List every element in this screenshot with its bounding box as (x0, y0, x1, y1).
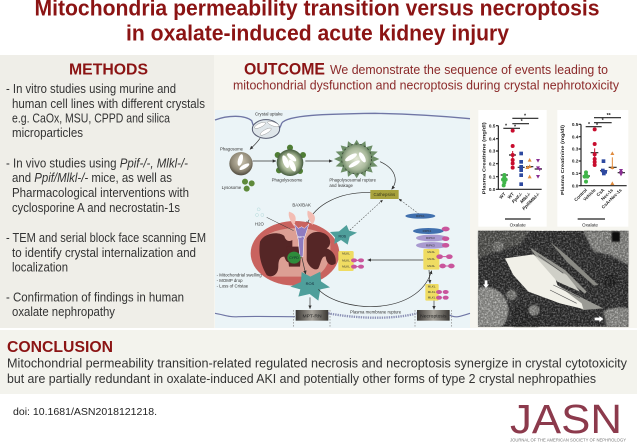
arrow (253, 160, 276, 162)
chart: right creatinine: 0.3 (572, 147, 579, 152)
chart: left creatinine: 0.1 (489, 174, 496, 179)
chart: right creatinine: Oxalate (582, 222, 598, 227)
chart: left creatinine: * (521, 119, 524, 125)
necroptosis signalling stack: RIPK3 (426, 243, 435, 247)
methods list: - TEM and serial block face scanning EM (6, 231, 206, 245)
chart: right creatinine: Plasma Creatinine (mg/dl) (560, 125, 566, 195)
chart: left creatinine: * (505, 124, 508, 130)
MLKL mitochondrial: MLKL (342, 251, 350, 255)
outcome text: mitochondrial dysfunction and necroptosis during crystal nephrotoxicity (233, 78, 620, 92)
chart: right creatinine: 0.1 (572, 171, 579, 176)
charts and micrograph (478, 110, 628, 327)
chart: left creatinine: * (524, 113, 527, 119)
outcome text: We demonstrate the sequence of events leading to (330, 63, 608, 77)
chart: right creatinine: ** (607, 113, 612, 119)
chart: left creatinine: 0.3 (489, 149, 496, 154)
chart: right creatinine (557, 110, 628, 227)
necroptosis box: Necroptosis (420, 313, 447, 319)
methods list (6, 82, 206, 319)
mitochondrial effects text (217, 273, 262, 288)
methods heading: METHODS (69, 62, 148, 78)
crystal uptake: Crystal uptake (255, 111, 283, 116)
MLKL mitochondrial: MLKL (342, 258, 350, 262)
conclusion text (7, 356, 628, 386)
methods list: oxalate nephropathy (12, 305, 116, 319)
chart: left creatinine: 0.2 (489, 161, 496, 166)
necroptosis signalling stack: MLKL (427, 264, 436, 268)
panel: outcome (214, 55, 637, 328)
chart: right creatinine: 0.2 (572, 159, 579, 164)
conclusion heading: CONCLUSION (7, 339, 113, 356)
ROS small star (330, 225, 357, 245)
mitochondrial effects text: - Mitochondrial swelling (217, 273, 262, 278)
chart: left creatinine: Plasma Creatinine (mg/dl) (482, 122, 488, 194)
chart: left creatinine: 0.0 (489, 187, 496, 192)
ruptured phagolysosome: Phagolysosomal rupture (329, 177, 377, 182)
ROS curve to MLKL (318, 271, 432, 307)
necroptosis signalling stack: MLKL (428, 296, 436, 300)
JASN logo: JOURNAL OF THE AMERICAN SOCIETY OF NEPHROLOGY (510, 438, 626, 442)
micrograph: crystal in TEM (478, 231, 628, 327)
mitochondrial effects text: - Loss of Cristae (217, 283, 249, 288)
necroptosis signalling stack: RIPK1 (423, 229, 432, 233)
dashed arrows (350, 199, 419, 230)
chart: right creatinine: CsA+Nec-1s (601, 187, 623, 210)
methods list: - In vivo studies using Ppif-/-, Mlkl-/- (6, 156, 188, 170)
MPT-RN box (296, 310, 328, 321)
H2O: H2O (255, 221, 265, 226)
plasma membrane bottom (215, 310, 470, 327)
methods list: and Ppif/Mlkl-/- mice, as well as (12, 171, 172, 185)
chart: left creatinine: * (514, 124, 517, 130)
methods list: localization (12, 260, 68, 274)
ruptured phagolysosome: and leakage (329, 183, 354, 188)
chart: right creatinine: * (588, 122, 591, 128)
cathepsins: Cathepsins (374, 192, 395, 197)
doi: doi: 10.1681/ASN2018121218. (13, 406, 157, 418)
arrow (305, 160, 332, 162)
mechanism diagram (215, 110, 470, 328)
phagosome (220, 147, 253, 175)
chart: right creatinine: * (596, 123, 599, 129)
plasma membrane rupture label: Plasma membrane rupture (350, 310, 402, 315)
methods list: cyclosporine A and necrostatin-1s (12, 201, 180, 215)
chart: right creatinine: 0.4 (572, 134, 579, 139)
outcome heading: OUTCOME (244, 60, 325, 78)
lysosome (222, 179, 255, 192)
chart: right creatinine: Nec-1s (600, 187, 614, 201)
necroptosis signalling stack: MLKL (427, 250, 436, 254)
CYPD: CYPD (289, 256, 299, 260)
mitochondrial effects text: - MOMP drop (217, 278, 243, 283)
cell membrane top (215, 113, 470, 136)
arrow cathepsins to pore (307, 193, 370, 225)
chart: right creatinine: Control (573, 188, 588, 202)
arrow MLKL translocation (368, 259, 423, 261)
chart: right creatinine: * (602, 118, 605, 124)
arrow to cathepsins (380, 162, 395, 189)
BAX/BAK: BAX/BAK (292, 202, 311, 207)
micrograph arrows (483, 280, 603, 322)
ROS large star (290, 272, 330, 301)
panel: conclusion (0, 330, 637, 394)
title (34, 0, 600, 46)
methods list: - In vitro studies using murine and (6, 82, 176, 96)
ruptured phagolysosome (329, 140, 379, 188)
outcome text (233, 63, 620, 92)
necroptosis box (417, 310, 450, 321)
conclusion text: Mitochondrial permeability transition-related regulated necrosis and necroptosis synergize in crystal cytotoxicity (7, 356, 628, 370)
mitochondrion (251, 202, 339, 286)
conclusion text: but are partially redundant in oxalate-induced AKI and potentially other forms of type 2 crystal nephropathies (7, 372, 596, 386)
cathepsins (370, 190, 399, 199)
panel: methods (0, 55, 214, 328)
chart: left creatinine: Mlkl-/- (519, 191, 532, 204)
chart: left creatinine: Ppif/Mlkl-/- (521, 191, 541, 211)
title: in oxalate-induced acute kidney injury (126, 20, 510, 46)
chart: right creatinine: 0.5 (572, 122, 579, 127)
JASN logo: JASN (510, 396, 622, 442)
arrows to outcomes (310, 297, 434, 309)
chart: left creatinine: WT (498, 191, 507, 200)
MLKL mitochondrial (338, 251, 364, 271)
lysosome: Lysosome (222, 185, 242, 190)
crystal uptake (250, 111, 283, 149)
methods list: microparticles (12, 126, 83, 140)
chart: left creatinine (478, 110, 547, 227)
chart: left creatinine: Oxalate (510, 222, 526, 227)
MPT-RN box: MPT-RN (302, 313, 322, 319)
ROS small star: ROS (339, 234, 347, 238)
phagolysosome (272, 145, 306, 183)
MPT pore: MPT (298, 235, 304, 239)
chart: right creatinine: CsA (595, 187, 606, 197)
ROS large star: ROS (306, 281, 315, 286)
phagolysosome: Phagolysosome (272, 178, 303, 183)
necroptosis signalling stack: MLKL (428, 290, 436, 294)
MLKL mitochondrial: MLKL (342, 265, 350, 269)
methods list: e.g. CaOx, MSU, CPPD and silica (12, 112, 170, 126)
necroptosis signalling stack (405, 213, 455, 301)
methods list: to identify crystal internalization and (12, 246, 196, 260)
chart: left creatinine: 0.5 (489, 123, 496, 128)
necroptosis signalling stack: MLKL (428, 284, 436, 288)
methods list: - Confirmation of findings in human (6, 290, 184, 304)
chart: left creatinine: Ppif-/- (511, 191, 524, 204)
chart: left creatinine: WT (507, 191, 515, 200)
chart: left creatinine: 0.4 (489, 136, 496, 141)
necroptosis signalling stack: RIPK3 (426, 236, 435, 240)
methods list: Pharmacological interventions with (12, 186, 189, 200)
chart: right creatinine: Vehicle (582, 187, 597, 202)
phagosome: Phagosome (220, 147, 244, 152)
chart: right creatinine: 0.0 (572, 183, 579, 188)
methods list: human cell lines with different crystals (12, 97, 205, 111)
necroptosis signalling stack: MLKL (427, 257, 436, 261)
necroptosis signalling stack: RIPK1 (416, 214, 425, 218)
